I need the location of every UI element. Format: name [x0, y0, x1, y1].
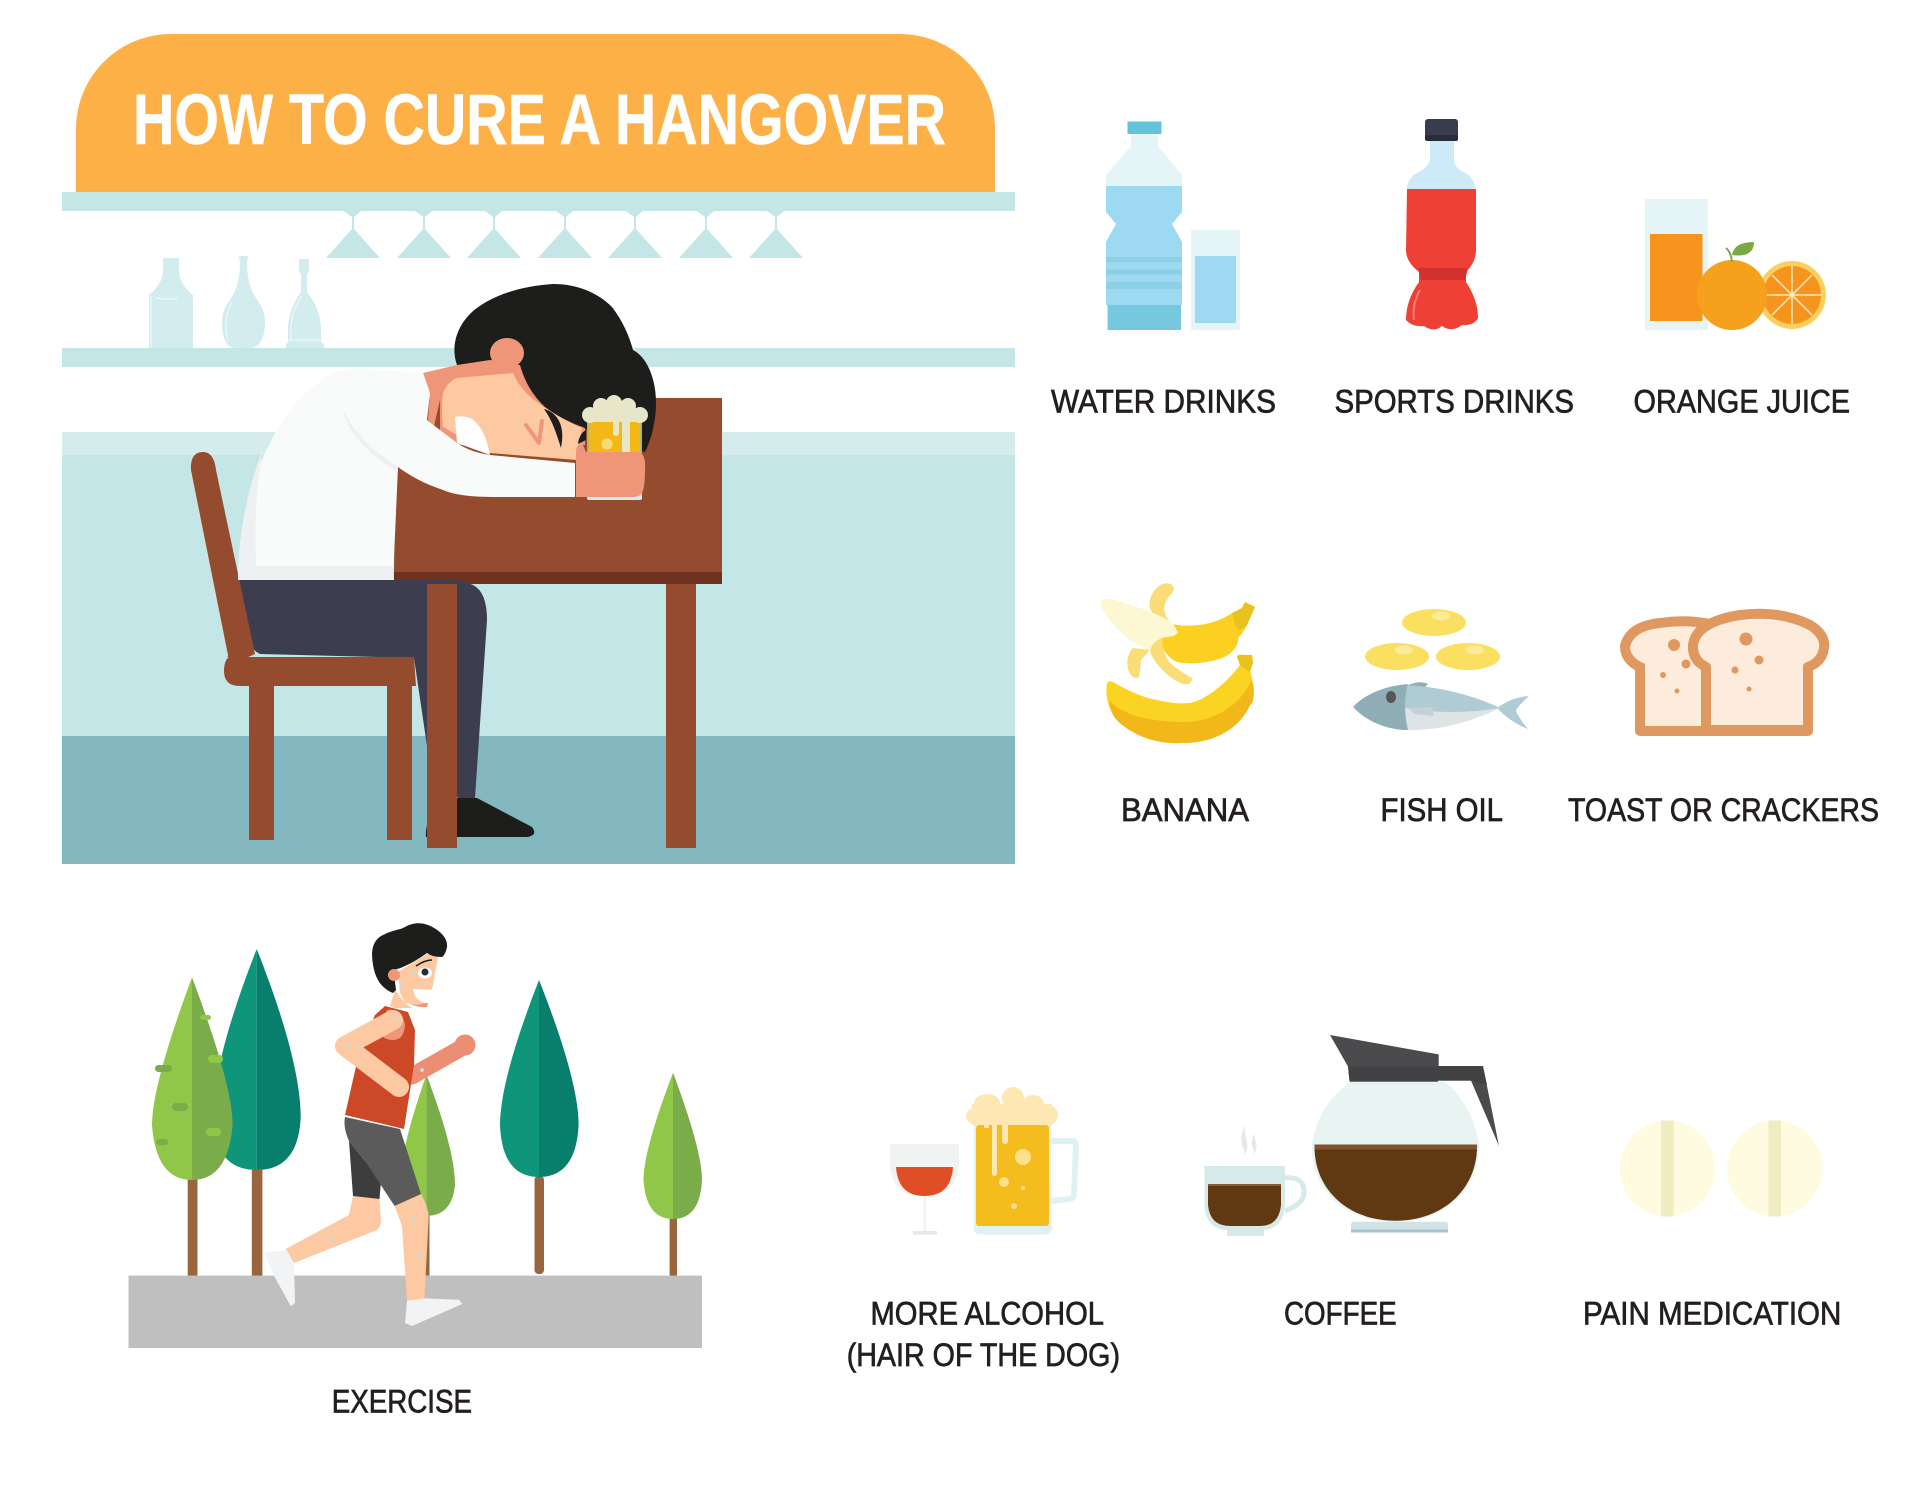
- near shorts: [344, 1117, 421, 1206]
- small peel: [1127, 648, 1150, 678]
- chair back: [191, 452, 255, 665]
- wall: [62, 432, 1015, 455]
- label: FISH OIL: [1380, 792, 1503, 828]
- pants: [238, 580, 487, 798]
- label: ORANGE JUICE: [1634, 384, 1850, 420]
- fish: [1353, 682, 1529, 730]
- rear shorts: [349, 1141, 382, 1199]
- ear: [388, 969, 400, 981]
- tree 5: [644, 1073, 702, 1276]
- item: water drinks: [1051, 122, 1276, 420]
- steam: [1241, 1125, 1256, 1158]
- item: fish oil: [1353, 609, 1529, 828]
- sports bottle: [1406, 119, 1478, 330]
- lower peel: [1150, 638, 1192, 684]
- item: pain medication: [1583, 1120, 1841, 1332]
- label: TOAST OR CRACKERS: [1568, 792, 1879, 828]
- juice glass: [1645, 199, 1708, 330]
- foam: [582, 395, 648, 452]
- ground: [128, 1276, 702, 1348]
- title: HOW TO CURE A HANGOVER: [133, 81, 946, 160]
- ear: [490, 338, 524, 368]
- tree 4: [500, 980, 579, 1274]
- neck and skin edge: [423, 360, 585, 445]
- label: PAIN MEDICATION: [1583, 1296, 1841, 1332]
- beer glass in hand: [576, 395, 648, 500]
- hand: [576, 443, 645, 497]
- panel: bar scene: [62, 34, 1015, 864]
- orange slice: [1758, 261, 1826, 329]
- item: more alcohol: [847, 1087, 1120, 1373]
- hair: [454, 284, 656, 452]
- rear shoe: [264, 1250, 295, 1307]
- far arm: [412, 1047, 463, 1076]
- shoulder shadow: [380, 1010, 405, 1040]
- rear leg: [286, 1196, 381, 1263]
- wine glass: [890, 1144, 959, 1234]
- upper peel: [1150, 583, 1174, 624]
- eyebrow: [544, 409, 562, 448]
- upper banana back: [1172, 602, 1255, 645]
- label line 2: (HAIR OF THE DOG): [847, 1337, 1120, 1373]
- label: COFFEE: [1284, 1296, 1397, 1332]
- runner: [264, 923, 476, 1326]
- glass of water: [1191, 230, 1240, 330]
- label: BANANA: [1121, 792, 1250, 828]
- label: MORE ALCOHOL: [870, 1296, 1104, 1332]
- banana icon: [1100, 583, 1255, 743]
- coffee cup: [1204, 1166, 1304, 1236]
- wall lower: [62, 455, 1015, 736]
- face: [398, 954, 438, 1005]
- hanging glasses: [326, 211, 803, 258]
- whole orange: [1697, 242, 1767, 330]
- shoe: [426, 798, 534, 837]
- label: WATER DRINKS: [1051, 384, 1276, 420]
- eye: [418, 968, 432, 978]
- table leg far: [666, 584, 696, 848]
- table leg near: [427, 584, 457, 848]
- coffee pot: [1312, 1035, 1499, 1232]
- bread icon: [1625, 614, 1824, 731]
- front leg: [395, 1194, 429, 1301]
- front shoe: [405, 1298, 462, 1326]
- chair seat: [224, 656, 416, 686]
- table top: [394, 398, 722, 572]
- lower banana shade: [1109, 680, 1254, 743]
- item: banana: [1100, 583, 1255, 828]
- item: toast or crackers: [1568, 614, 1879, 828]
- upper shelf: [62, 192, 1015, 211]
- item: orange juice: [1634, 199, 1850, 420]
- eye shadow: [578, 430, 586, 444]
- lower shelf: [62, 348, 1015, 367]
- item: exercise: [128, 923, 702, 1420]
- tree 2: [213, 949, 301, 1276]
- item: coffee: [1204, 1035, 1499, 1332]
- tree 3: [400, 1075, 455, 1276]
- item: sports drinks: [1334, 119, 1574, 420]
- neck: [390, 990, 412, 1008]
- table edge: [394, 572, 722, 584]
- cheek mark: [526, 421, 542, 443]
- water bottle: [1106, 122, 1182, 330]
- front banana: [1162, 628, 1239, 663]
- pill left: [1620, 1120, 1715, 1216]
- brow: [416, 960, 432, 966]
- tree 1: [152, 977, 233, 1276]
- label: SPORTS DRINKS: [1334, 384, 1574, 420]
- pale flesh: [1100, 599, 1178, 651]
- hair: [372, 923, 447, 993]
- lip under smile: [405, 1001, 428, 1007]
- shelf bottles: [149, 256, 324, 348]
- rear chair leg: [387, 686, 412, 840]
- capsules: [1365, 609, 1500, 670]
- smile: [413, 989, 434, 1003]
- pill right: [1727, 1120, 1822, 1216]
- face: [442, 373, 582, 460]
- shirt shadow: [238, 410, 398, 580]
- title banner: [76, 34, 995, 192]
- shirt: [238, 368, 575, 580]
- collar: [455, 416, 490, 455]
- floor: [62, 736, 1015, 864]
- lower banana: [1106, 655, 1253, 743]
- bottle highlights: [151, 296, 322, 347]
- chair front leg: [249, 686, 274, 840]
- near arm: [345, 1020, 399, 1087]
- label: EXERCISE: [332, 1384, 472, 1420]
- tank top: [345, 1006, 415, 1129]
- foam: [966, 1087, 1058, 1176]
- sweat drops: [330, 970, 424, 1258]
- beer mug: [966, 1087, 1076, 1234]
